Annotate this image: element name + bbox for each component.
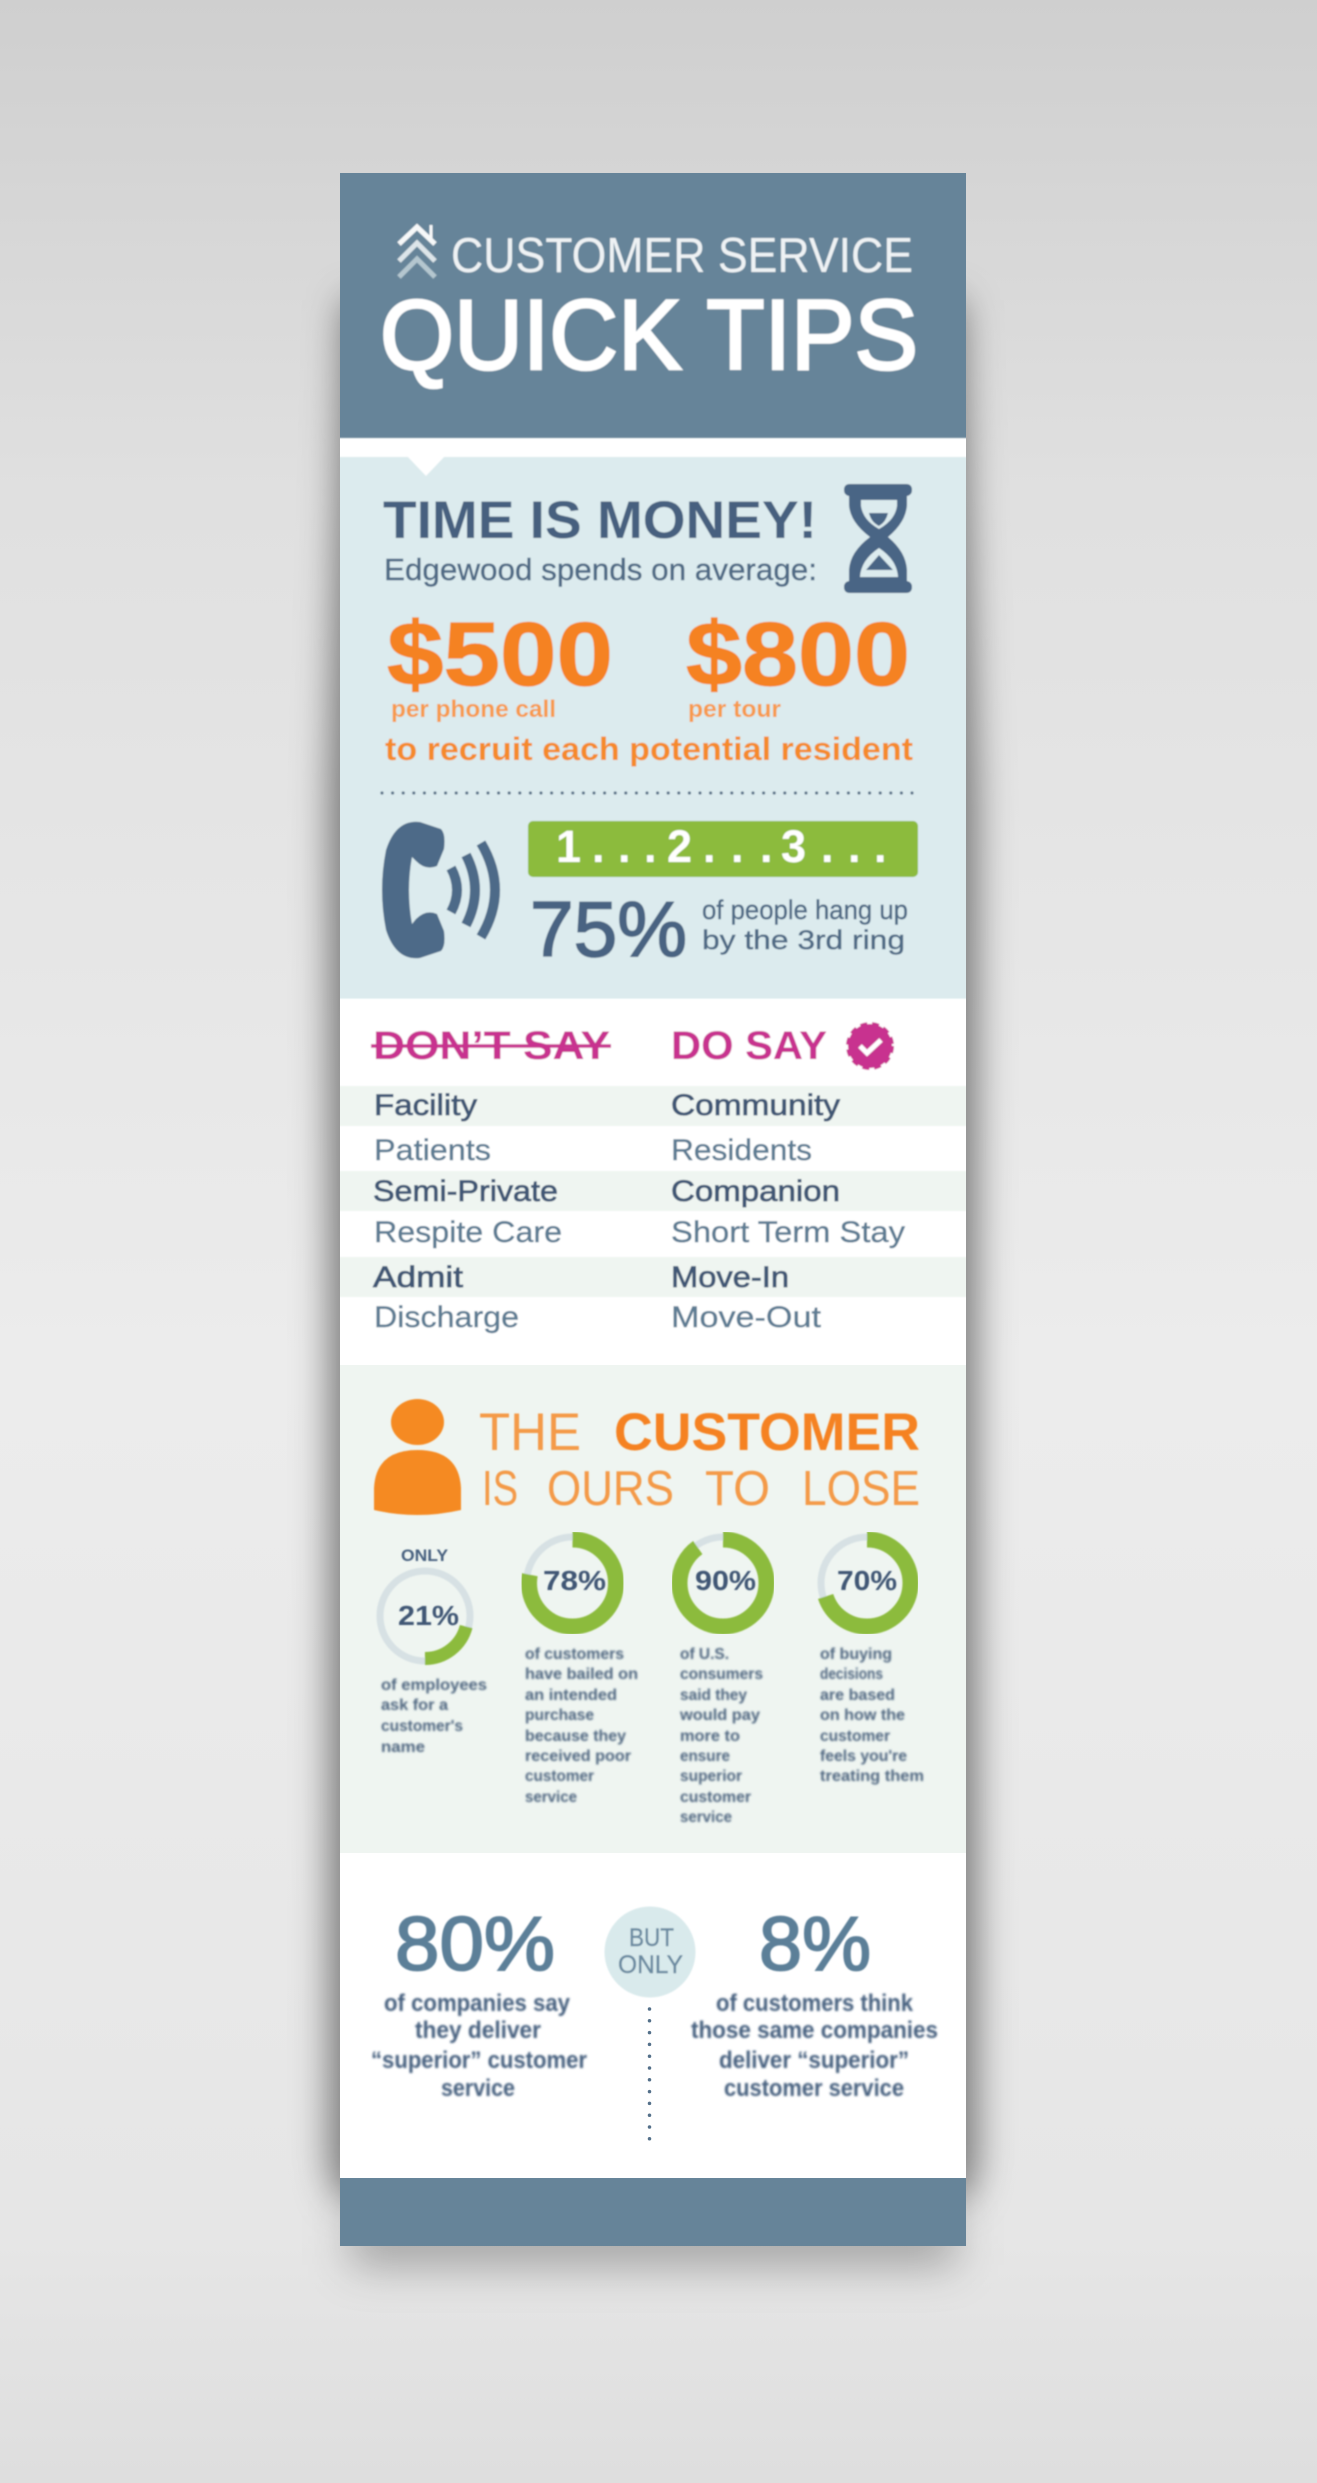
caption: 90%: of U.S. bbox=[680, 1646, 729, 1663]
panel: footer band bbox=[340, 2178, 966, 2246]
stat: 78% donut: 78% bbox=[543, 1565, 606, 1596]
heading: the customer is ours to lose: TO bbox=[705, 1462, 770, 1516]
stat: 21% donut: 21% bbox=[398, 1600, 459, 1631]
caption: 78%: because they bbox=[525, 1728, 626, 1745]
caption: 90%: consumers bbox=[680, 1666, 763, 1683]
caption: 90%: customer bbox=[680, 1789, 751, 1806]
heading: the customer is ours to lose: IS bbox=[482, 1462, 518, 1516]
caption: 21%: name bbox=[381, 1739, 425, 1756]
heading: the customer is ours to lose: LOSE bbox=[802, 1462, 920, 1516]
caption: 90%: said they bbox=[680, 1687, 747, 1704]
caption: 78%: of customers bbox=[525, 1646, 624, 1663]
stat: 8%: 8% bbox=[759, 1902, 871, 1987]
subtitle: CUSTOMER SERVICE bbox=[451, 229, 913, 283]
caption: 78%: an intended bbox=[525, 1687, 617, 1704]
caption: 78%: received poor bbox=[525, 1748, 631, 1765]
word list: do say: Companion bbox=[671, 1175, 840, 1208]
caption: 70%: customer bbox=[820, 1728, 890, 1745]
word list: do say: Move-In bbox=[671, 1261, 789, 1294]
text: customers think bbox=[691, 1990, 938, 2102]
caption: 21%: of employees bbox=[381, 1677, 487, 1694]
text: hang up: by the 3rd ring bbox=[702, 925, 905, 955]
word list: don't say: Respite Care bbox=[374, 1216, 562, 1249]
stat: 21% donut: ONLY bbox=[401, 1546, 449, 1565]
caption: 78%: have bailed on bbox=[525, 1666, 638, 1683]
text: to recruit: to recruit each potential resident bbox=[385, 731, 913, 767]
badge: but only: ONLY bbox=[618, 1951, 683, 1979]
heading: the customer is ours to lose: THE bbox=[479, 1403, 581, 1462]
caption: 70%: on how the bbox=[820, 1707, 905, 1724]
title: QUICK TIPS bbox=[380, 279, 918, 390]
stat: 75%: 75% bbox=[530, 885, 687, 973]
text: companies say bbox=[371, 1990, 587, 2102]
word list: don't say: Patients bbox=[374, 1134, 491, 1167]
word list: don't say: Admit bbox=[373, 1261, 464, 1294]
panel: header bbox=[335, 168, 971, 438]
caption: 90%: superior bbox=[680, 1768, 742, 1785]
heading: the customer is ours to lose: OURS bbox=[547, 1462, 674, 1516]
caption: 21%: customer's bbox=[381, 1718, 463, 1735]
caption: 90%: more to bbox=[680, 1728, 740, 1745]
label: per phone call: per phone call bbox=[391, 696, 556, 723]
icon: check badge bbox=[848, 1024, 892, 1068]
text: customers think: deliver “superior” bbox=[719, 2047, 909, 2074]
heading: the customer is ours to lose bbox=[479, 1412, 920, 1506]
caption: 78%: customer bbox=[525, 1768, 594, 1785]
badge: but only bbox=[604, 1906, 696, 1998]
panel: don't say / do say bbox=[340, 1021, 966, 1334]
caption: 70%: decisions bbox=[820, 1666, 883, 1683]
word list: do say: Residents bbox=[671, 1134, 812, 1167]
stat: 70% donut: 70% bbox=[837, 1565, 897, 1596]
icon: person bbox=[374, 1399, 461, 1515]
caption: 78%: service bbox=[525, 1789, 577, 1806]
infographic card bbox=[335, 168, 971, 2246]
stat: 70% donut bbox=[821, 1537, 913, 1629]
word list: don't say: Discharge bbox=[374, 1301, 519, 1334]
badge: but only: BUT bbox=[629, 1924, 674, 1952]
text: companies say: they deliver bbox=[415, 2017, 541, 2044]
heading: don't say: DON’T SAY bbox=[373, 1024, 610, 1068]
text: hang up: of people hang up bbox=[702, 895, 908, 925]
text: companies say: service bbox=[441, 2075, 515, 2102]
caption: 70%: of buying bbox=[820, 1646, 892, 1663]
caption: 90% bbox=[679, 1646, 763, 1826]
caption: 90%: ensure bbox=[680, 1748, 730, 1765]
label: per tour: per tour bbox=[688, 696, 781, 723]
text: edgewood spends: Edgewood spends on average: bbox=[384, 552, 817, 587]
caption: 70%: feels you're bbox=[820, 1748, 907, 1765]
word list: do say: Move-Out bbox=[671, 1301, 822, 1334]
word list: don't say: Facility bbox=[374, 1089, 477, 1122]
caption: 90%: service bbox=[680, 1809, 732, 1826]
caption: 70% bbox=[820, 1646, 924, 1785]
word list: do say bbox=[671, 1089, 905, 1334]
caption: 78% bbox=[525, 1646, 638, 1806]
caption: 70%: are based bbox=[820, 1687, 895, 1704]
ring counter bar: 1...2...3... bbox=[556, 821, 887, 872]
stat: 90% donut: 90% bbox=[695, 1565, 756, 1596]
heading: the customer is ours to lose: CUSTOMER bbox=[614, 1403, 920, 1462]
text: hang up bbox=[702, 895, 908, 955]
text: companies say: “superior” customer bbox=[371, 2047, 587, 2074]
icon: ringing phone bbox=[382, 822, 495, 958]
caption: 21%: ask for a bbox=[381, 1697, 448, 1714]
word list: do say: Community bbox=[671, 1089, 840, 1122]
stat: $800: $800 bbox=[686, 605, 910, 705]
caption: 70%: treating them bbox=[820, 1768, 924, 1785]
stat: 78% donut bbox=[526, 1537, 618, 1629]
text: customers think: customer service bbox=[724, 2075, 904, 2102]
stat: $500: $500 bbox=[387, 605, 613, 705]
caption: 78%: purchase bbox=[525, 1707, 594, 1724]
text: companies say: of companies say bbox=[384, 1990, 571, 2017]
stat: 90% donut bbox=[677, 1537, 769, 1629]
icon: hourglass bbox=[844, 484, 912, 593]
heading: do say: DO SAY bbox=[671, 1024, 827, 1068]
word list: don't say bbox=[373, 1089, 562, 1334]
heading: time is money: TIME IS MONEY! bbox=[383, 491, 817, 550]
stat: 80%: 80% bbox=[395, 1902, 555, 1987]
word list: don't say: Semi-Private bbox=[373, 1175, 558, 1208]
text: customers think: of customers think bbox=[716, 1990, 914, 2017]
panel: the customer bbox=[340, 1365, 966, 1853]
caption: 21% bbox=[381, 1677, 487, 1756]
caption: 90%: would pay bbox=[679, 1707, 760, 1724]
panel: time is money bbox=[335, 455, 971, 999]
text: customers think: those same companies bbox=[691, 2017, 938, 2044]
word list: do say: Short Term Stay bbox=[671, 1216, 905, 1249]
panel: 80% vs 8% bbox=[371, 1906, 938, 2140]
stat: 21% donut bbox=[373, 1546, 477, 1668]
icon: house chevrons bbox=[399, 225, 435, 277]
